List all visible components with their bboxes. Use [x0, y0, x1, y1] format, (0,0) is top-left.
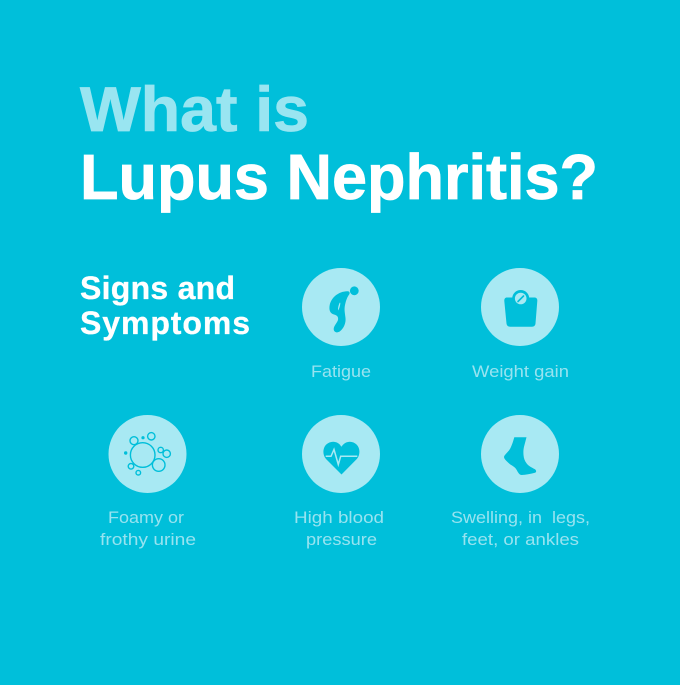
label: foamy or frothy urine: Foamy or	[108, 508, 184, 527]
label: swelling in legs, feet, or ankles	[451, 508, 590, 549]
label: fatigue: Fatigue	[311, 362, 371, 381]
label: weight gain: Weight gain	[472, 362, 569, 381]
title	[80, 75, 598, 213]
symptom: foamy urine	[100, 415, 196, 549]
heading: signs and symptoms: Signs and	[80, 270, 235, 306]
label: high blood pressure	[294, 508, 384, 549]
title: Lupus Nephritis?	[80, 141, 598, 213]
label: swelling in legs, feet, or ankles: Swelling, in legs,	[451, 508, 590, 527]
icon: weighing scale	[504, 290, 537, 327]
symptom: swelling	[451, 415, 590, 549]
label: foamy or frothy urine	[100, 508, 196, 549]
icon: bubbles	[124, 433, 170, 475]
symptom: high blood pressure	[294, 415, 384, 549]
symptom: fatigue	[302, 268, 380, 381]
title: What is	[80, 75, 309, 145]
label: swelling in legs, feet, or ankles: feet, or ankles	[462, 530, 579, 549]
icon: foot	[504, 437, 536, 475]
label: high blood pressure: High blood	[294, 508, 384, 527]
heading: signs and symptoms	[80, 270, 250, 341]
label: foamy or frothy urine: frothy urine	[100, 530, 196, 549]
label: high blood pressure: pressure	[306, 530, 377, 549]
icon: heart with pulse	[323, 442, 359, 474]
symptom: weight gain	[472, 268, 569, 381]
icon: fatigued figure	[329, 286, 359, 332]
heading: signs and symptoms: Symptoms	[80, 305, 250, 341]
